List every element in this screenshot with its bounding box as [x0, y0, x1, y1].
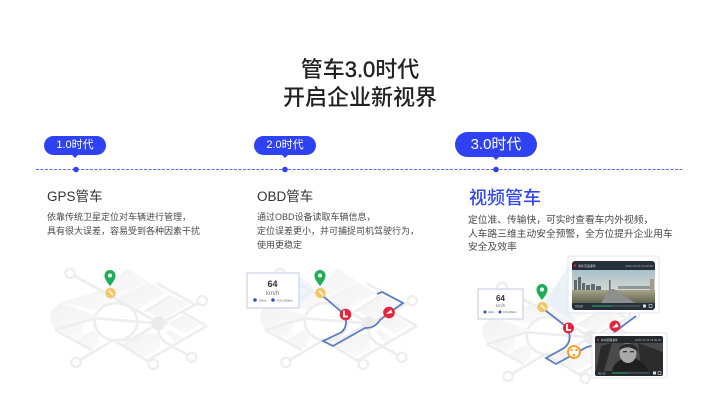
- heading: OBD: OBD管车: [257, 189, 313, 204]
- text: GPS description: 依靠传统卫星定位对车辆进行管理，: [47, 212, 191, 222]
- speed card: video: [478, 289, 523, 319]
- title: [283, 57, 437, 110]
- text: OBD description: 使用更稳定: [257, 240, 302, 250]
- icon: OBD location pin: [314, 270, 326, 298]
- heading: video: 视频管车: [469, 188, 541, 208]
- icon: video location pin: [536, 284, 548, 312]
- speed card: OBD: 9.0L/100km: [277, 298, 293, 302]
- icon: GPS location pin: [104, 270, 116, 298]
- icon: OBD red turn marker: [340, 309, 351, 320]
- video panel: road camera: 00:30: [575, 304, 583, 308]
- text: GPS description: [47, 212, 200, 236]
- speed card: OBD: 64: [267, 279, 278, 289]
- video panel: driver camera: [592, 333, 667, 378]
- text: OBD description: 定位误差更小，并可捕捉司机驾驶行为，: [257, 226, 419, 236]
- icon: video red turn marker: [563, 322, 574, 334]
- era badge 1.0: 1.0时代: [56, 139, 94, 151]
- speed card: OBD: 24km: [259, 298, 267, 302]
- route: OBD trip: [323, 292, 403, 346]
- camera beam: [545, 266, 575, 322]
- text: video description: 安全及效率: [468, 242, 517, 253]
- text: GPS description: 具有很大误差，容易受到各种因素干扰: [47, 226, 200, 236]
- map: GPS: [51, 268, 207, 369]
- era badge 2.0: [254, 136, 316, 155]
- speed card: video: km/h: [496, 303, 506, 308]
- text: OBD description: 通过OBD设备读取车辆信息，: [257, 212, 376, 222]
- heading: GPS: GPS管车: [47, 189, 103, 204]
- speed card: video: 9.0L/100km: [503, 310, 517, 314]
- era badge 2.0: 2.0时代: [266, 139, 304, 151]
- era badge 1.0: [44, 136, 106, 155]
- video panel: driver camera: 车内视频事件: [601, 338, 618, 342]
- text: video description: 定位准、传输快，可实时查看车内外视频，: [468, 215, 653, 226]
- timeline: [36, 166, 682, 172]
- icon: OBD red alert marker: [383, 307, 395, 318]
- map: OBD: [247, 268, 417, 369]
- video panel: driver camera: 2020-07-26 18:00:00: [635, 338, 661, 342]
- title: 管车3.0时代: [301, 57, 419, 82]
- video panel: road camera: [568, 256, 659, 313]
- text: video description: 人车路三维主动安全预警，全方位提升企业用车: [468, 228, 673, 240]
- video panel: road camera: 海外高速事件: [578, 263, 596, 268]
- speed card: OBD: km/h: [266, 291, 279, 297]
- era badge 3.0: [455, 132, 537, 157]
- video panel: road camera: 2020-07-26 13:28:30: [625, 264, 653, 268]
- route: video trip: [545, 310, 636, 364]
- text: video description: [468, 214, 673, 253]
- speed card: video: 64: [496, 294, 505, 303]
- text: OBD description: [257, 212, 419, 250]
- video panel: driver camera: 00:30: [598, 372, 606, 376]
- icon: video orange face marker: [568, 346, 580, 358]
- speed card: OBD: [247, 273, 313, 308]
- speed card: video: 24km: [488, 310, 494, 314]
- map: video: [478, 266, 639, 383]
- title: 开启企业新视界: [283, 85, 437, 110]
- icon: video red alert marker: [610, 320, 620, 332]
- era badge 3.0: 3.0时代: [471, 136, 521, 153]
